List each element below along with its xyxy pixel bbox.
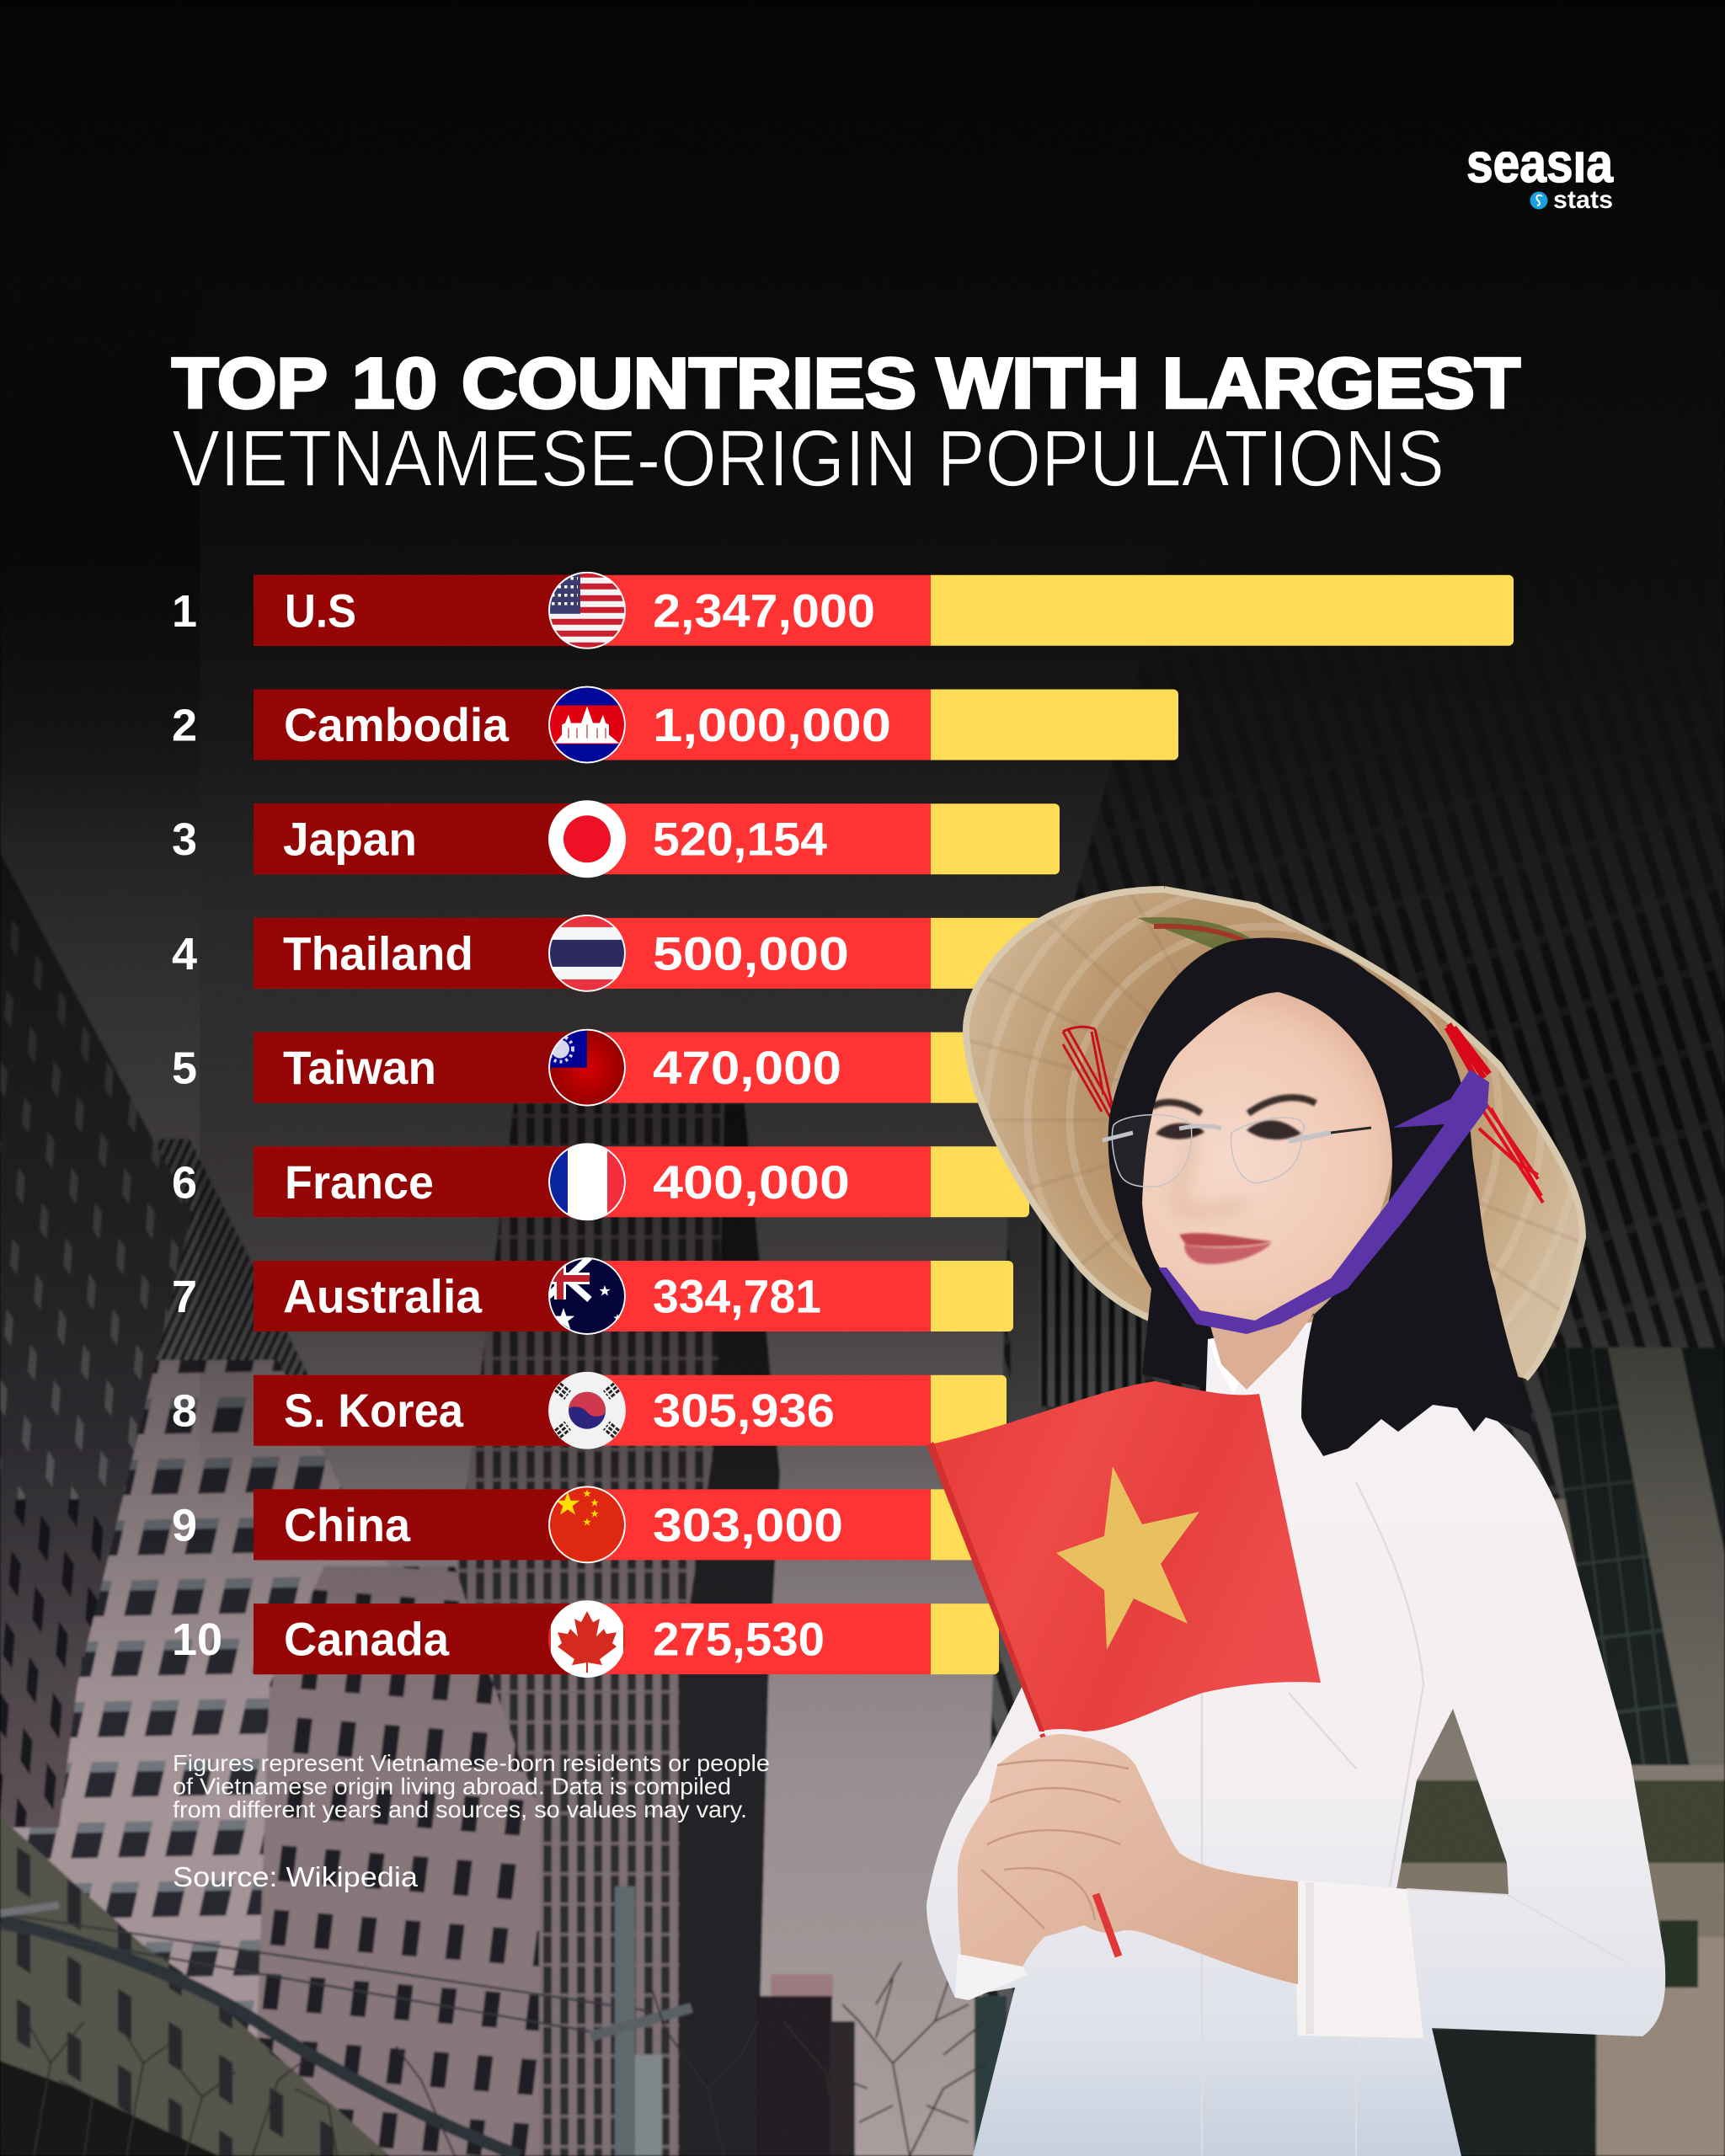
row 10: Canada: 10 xyxy=(172,1614,222,1665)
eyeglasses xyxy=(1103,1115,1371,1187)
row 3: Japan: 3 xyxy=(172,814,197,865)
row 1: U.S xyxy=(172,572,1514,649)
row 8: S. Korea xyxy=(172,1372,1007,1449)
row 3: Japan: Japan xyxy=(283,813,417,866)
hair: back xyxy=(1108,941,1314,1390)
face xyxy=(1141,992,1394,1322)
flag: Canada xyxy=(548,1600,626,1678)
flag star xyxy=(1056,1466,1199,1650)
dress sleeve cuff xyxy=(1293,1880,1423,2038)
row 6: France: France xyxy=(285,1155,434,1209)
street lamp arm and wires xyxy=(0,1905,650,2156)
building: striped wing behind xyxy=(157,1139,312,1381)
building: central tower xyxy=(455,1103,780,2156)
title: COUNTRIES xyxy=(462,344,916,423)
building: right stone facade xyxy=(1381,1348,1725,2156)
flag: Cambodia xyxy=(548,686,626,763)
row 10: Canada xyxy=(172,1600,999,1678)
flag: Thailand xyxy=(548,915,626,992)
row 2: Cambodia: 1,000,000 xyxy=(653,698,891,751)
row 10: Canada: 275,530 xyxy=(653,1613,825,1666)
woman in conical hat holding Vietnamese flag xyxy=(927,804,1665,2156)
logo: seasia stats: seasia xyxy=(1466,131,1614,194)
row 4: Thailand: Thailand xyxy=(283,926,473,979)
flag: Australia xyxy=(548,1257,626,1335)
hair: right side and top xyxy=(1120,937,1539,1456)
eyes xyxy=(1156,1120,1301,1139)
distant dark building xyxy=(756,1974,855,2156)
row 4: Thailand: 4 xyxy=(172,929,197,979)
row 2: Cambodia: Cambodia xyxy=(284,698,510,751)
row 7: Australia: 334,781 xyxy=(653,1270,821,1322)
row 3: Japan: 520,154 xyxy=(653,813,827,866)
row 9: China: 303,000 xyxy=(653,1498,843,1551)
title: WITH xyxy=(937,344,1140,423)
row 6: France: 400,000 xyxy=(653,1155,850,1209)
row 8: S. Korea: 305,936 xyxy=(653,1384,835,1437)
lips xyxy=(1179,1233,1272,1264)
hat red threads xyxy=(1063,1024,1543,1203)
title: 10 xyxy=(352,344,437,423)
flag stick lower part xyxy=(1096,1894,1119,1956)
building: low olive block xyxy=(0,1817,390,2156)
white ao dai dress xyxy=(927,1319,1665,2156)
row 2: Cambodia xyxy=(172,686,1178,763)
row 9: China: China xyxy=(284,1498,411,1551)
title xyxy=(172,344,1520,504)
title: VIETNAMESE-ORIGIN POPULATIONS xyxy=(172,414,1445,504)
flag stick xyxy=(1042,1734,1060,1777)
building: left dark tower xyxy=(0,842,202,1836)
title: TOP xyxy=(172,344,328,423)
row 5: Taiwan xyxy=(172,1029,1040,1107)
row 5: Taiwan: 5 xyxy=(172,1043,197,1094)
flag: South Korea xyxy=(548,1372,626,1449)
row 1: U.S: 2,347,000 xyxy=(653,584,875,637)
footnote text: from different years and sources, so values may vary. xyxy=(173,1796,747,1822)
bare tree branches xyxy=(17,1962,985,2156)
row 2: Cambodia: 2 xyxy=(172,701,197,751)
row 7: Australia xyxy=(172,1257,1013,1335)
conical hat xyxy=(948,804,1592,1436)
logo: seasia stats: stats xyxy=(1553,186,1613,214)
row 9: China: 9 xyxy=(172,1500,197,1550)
row 10: Canada: Canada xyxy=(284,1613,450,1666)
row 4: Thailand xyxy=(172,915,1053,992)
row 5: Taiwan: Taiwan xyxy=(283,1041,436,1094)
Vietnamese flag xyxy=(927,1381,1321,1732)
flag: China xyxy=(548,1486,626,1563)
lamp post xyxy=(590,1886,692,2156)
logo: seasia stats xyxy=(1467,152,1614,209)
flag: Japan xyxy=(548,800,626,878)
row 6: France xyxy=(172,1143,1029,1220)
building: right tower with diagonal stripes xyxy=(977,522,1725,2156)
row 6: France: 6 xyxy=(172,1157,197,1208)
row 5: Taiwan: 470,000 xyxy=(653,1041,841,1094)
row 3: Japan xyxy=(172,800,1060,878)
row 9: China xyxy=(172,1486,1002,1563)
flag: Taiwan xyxy=(547,1029,626,1107)
flag: France xyxy=(548,1143,626,1220)
flag: USA xyxy=(548,572,626,649)
row 7: Australia: Australia xyxy=(283,1270,483,1322)
building: beige high-rise xyxy=(0,1360,539,2156)
neck xyxy=(1204,1301,1322,1390)
building: mid block xyxy=(253,1566,539,2156)
footnote text: Figures represent Vietnamese-born residents or people xyxy=(173,1750,770,1776)
title: LARGEST xyxy=(1162,344,1520,423)
row 4: Thailand: 500,000 xyxy=(653,926,849,979)
source line: Source: Wikipedia xyxy=(173,1861,419,1892)
row 1: U.S: 1 xyxy=(172,586,197,637)
row 1: U.S: U.S xyxy=(285,584,356,637)
row 8: S. Korea: S. Korea xyxy=(284,1384,464,1437)
bar chart: ten countries xyxy=(172,572,1514,1678)
footnote text: of Vietnamese origin living abroad. Data is compiled xyxy=(173,1774,731,1799)
purple ribbon xyxy=(1158,1070,1489,1334)
row 7: Australia: 7 xyxy=(172,1272,197,1322)
footnote text xyxy=(173,1750,770,1822)
eyebrows xyxy=(1152,1097,1316,1113)
row 8: S. Korea: 8 xyxy=(172,1386,197,1437)
hands and forearm xyxy=(955,1734,1298,2000)
